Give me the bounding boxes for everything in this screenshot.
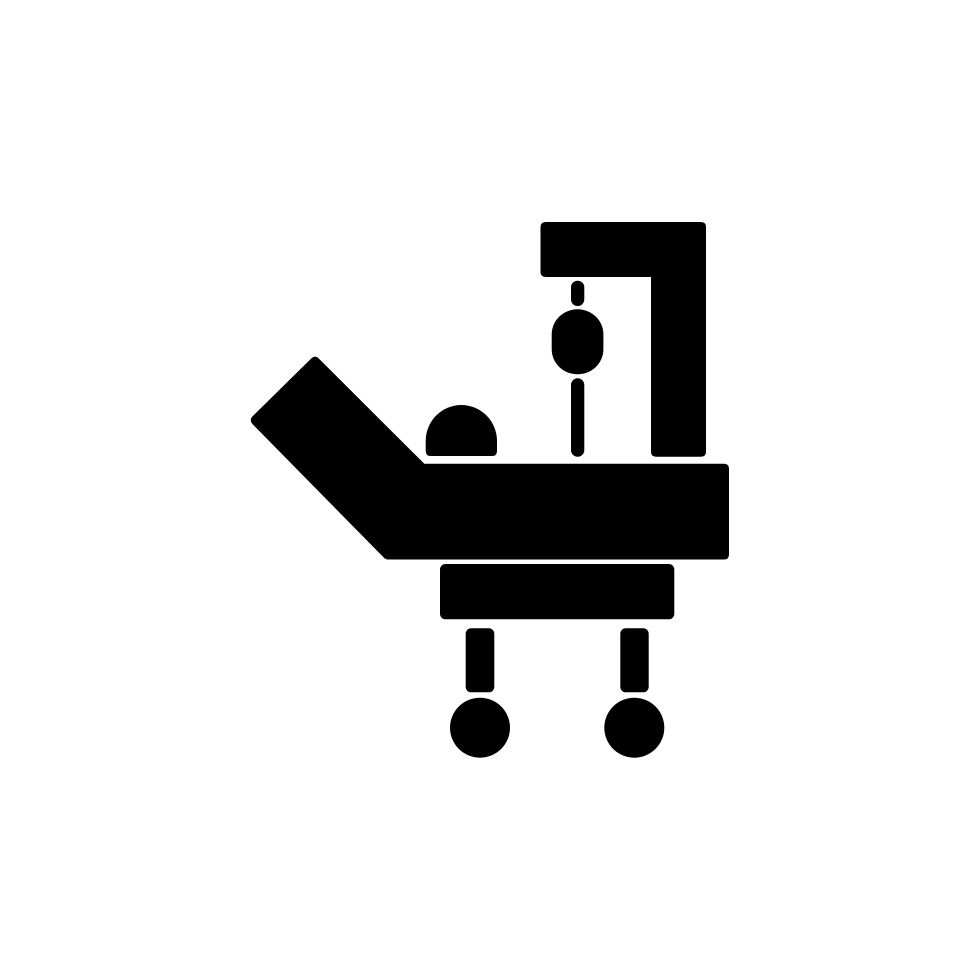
- icon: IV stand bracket: [540, 222, 706, 457]
- icon: right wheel: [604, 698, 664, 758]
- icon: bed mattress with raised backrest: [251, 357, 729, 560]
- icon: right leg: [620, 628, 649, 692]
- icon: left leg: [466, 628, 494, 692]
- icon: patient head: [426, 405, 497, 456]
- icon: bed base: [440, 564, 674, 619]
- icon: IV drip line: [571, 378, 584, 457]
- icon: IV connector tube: [571, 281, 584, 306]
- icon: left wheel: [450, 698, 510, 758]
- icon: IV drip bag: [552, 309, 603, 374]
